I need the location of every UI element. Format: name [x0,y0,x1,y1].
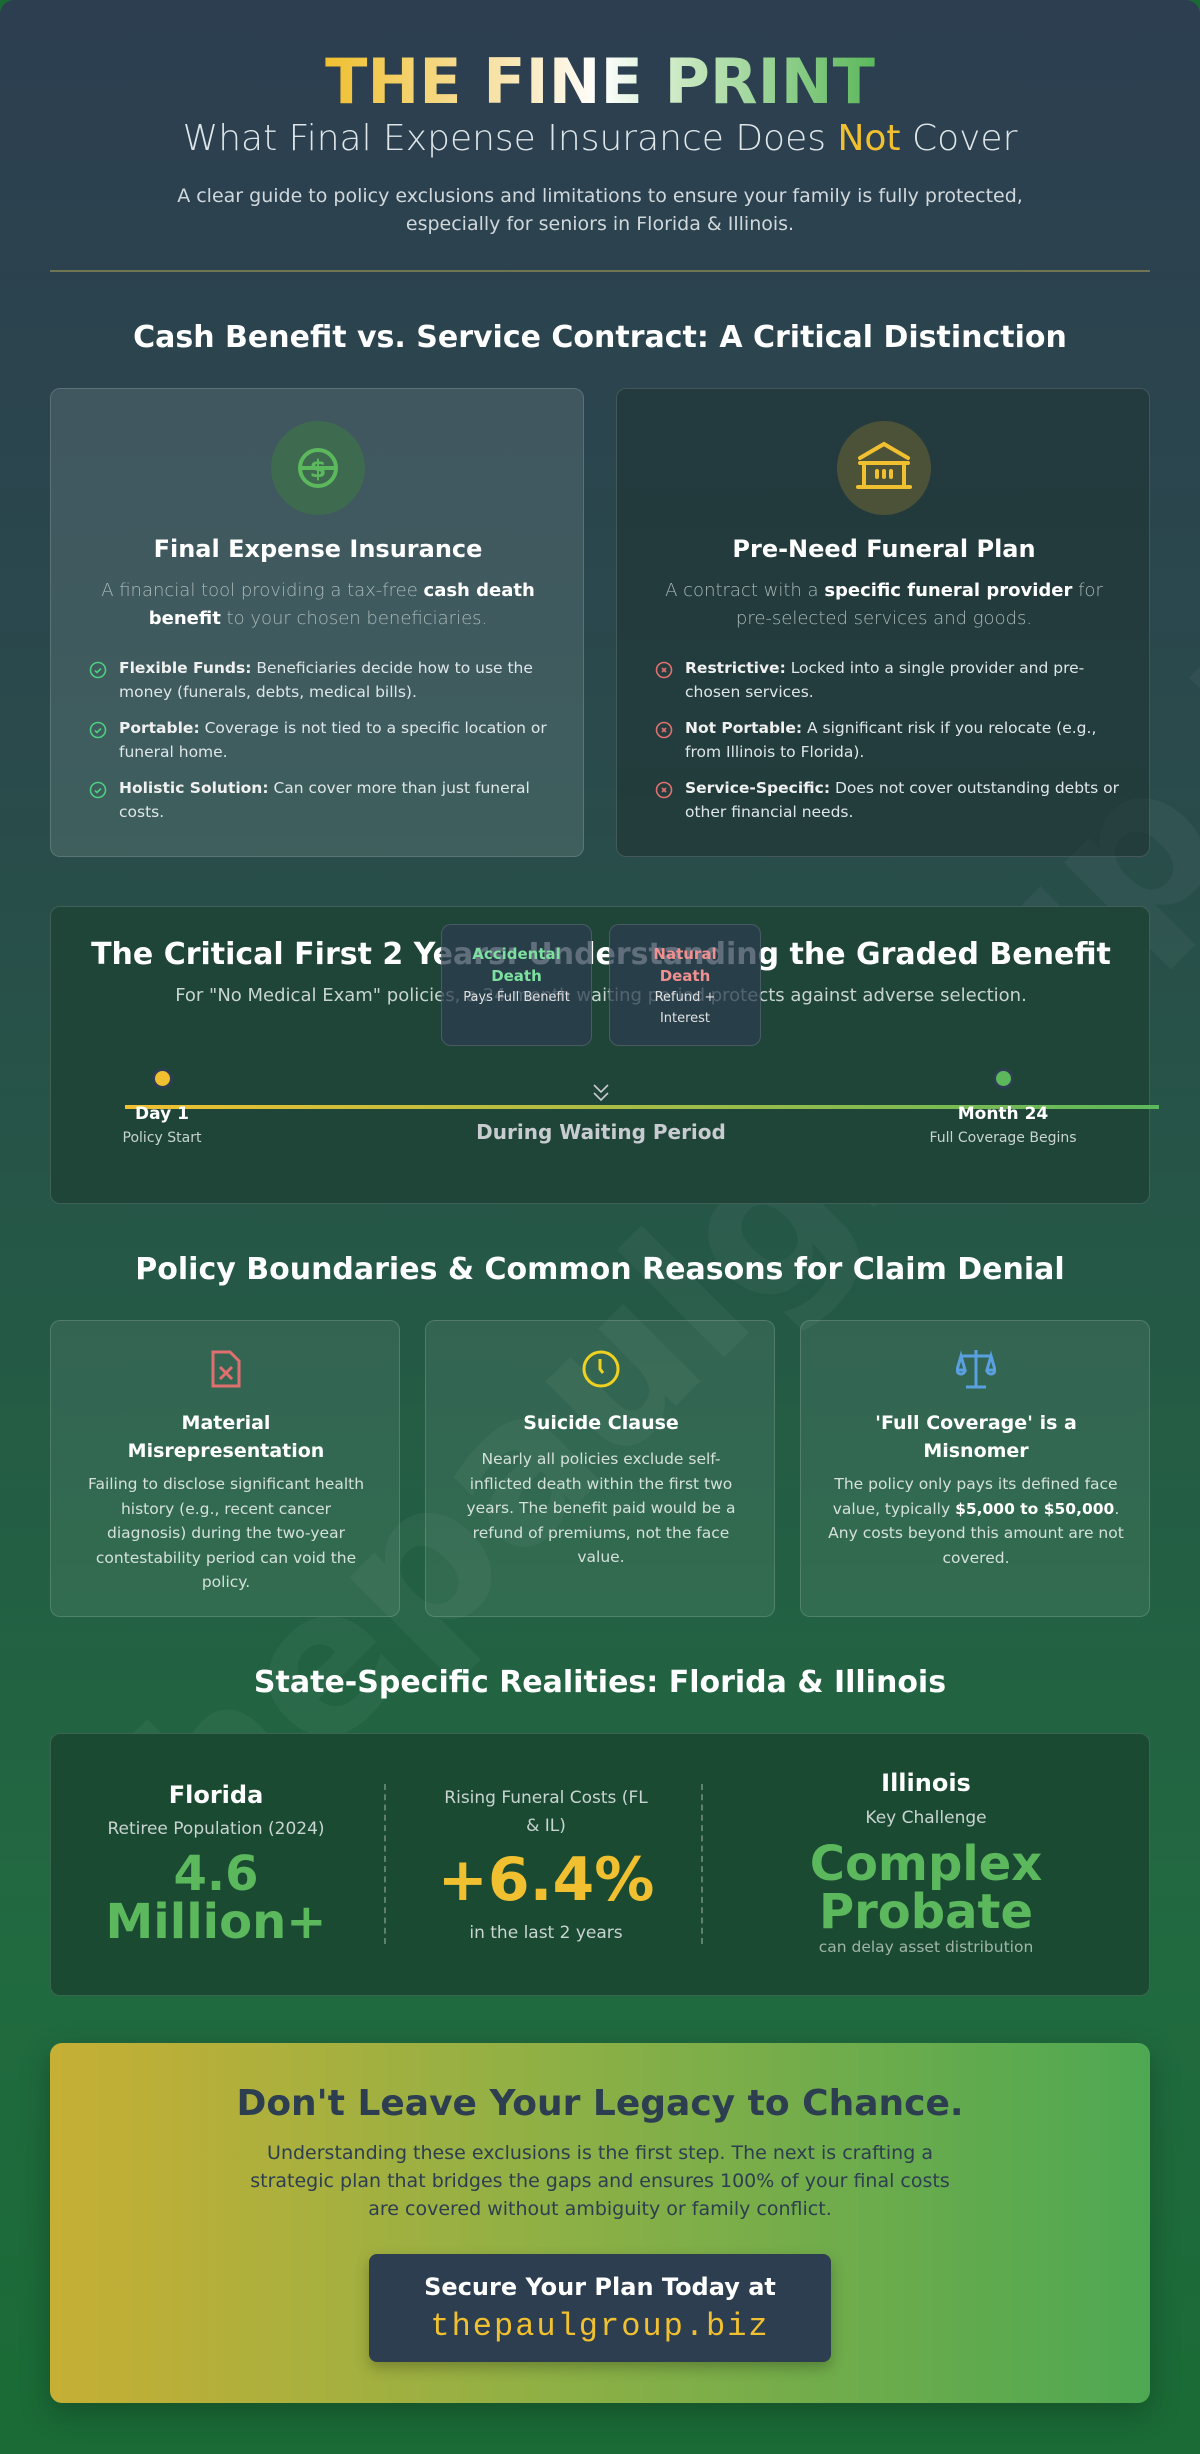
heading: graded benefit: The Critical First 2 Years: Understanding the Graded Benefit [91,937,1111,972]
list: benefits: Holistic Solution: Can cover more than just funeral costs. [119,779,530,821]
stat: florida [106,1781,326,1950]
subtext: For "No Medical Exam" policies, a 24-month waiting period protects against adverse selection. [175,985,1027,1006]
cta button: Secure Your Plan Today at [424,2273,776,2301]
card text: Failing to disclose significant health history (e.g., recent cancer diagnosis) during the two-year contestability period can void the policy. [88,1475,364,1591]
stat: illinois [810,1769,1042,1956]
box: natural death [609,924,761,1046]
panel: suicide clause [425,1320,775,1617]
stat: florida: Florida [169,1781,263,1809]
stat: funeral costs: in the last 2 years [469,1923,623,1943]
panel: material misrepresentation [50,1320,400,1617]
card title: 'Full Coverage' is a [875,1412,1077,1434]
stat: illinois: Illinois [881,1769,971,1797]
card text: Nearly all policies exclude self-inflicted death within the first two years. The benefit paid would be a refund of premiums, not the face value. [466,1450,736,1566]
stat: funeral costs: & IL) [526,1816,566,1836]
list: benefits: Flexible Funds: Beneficiaries decide how to use the money (funerals, debts, medical bills). [119,659,533,701]
icon: building [837,421,931,515]
icon: dollar [271,421,365,515]
card title: Final Expense Insurance [154,535,482,563]
icon: file x [212,1350,240,1388]
icon: dollar: $ [310,455,326,483]
box: natural death: Natural [653,945,717,963]
panel: graded benefit [50,906,1150,1204]
heading: cash vs service: Cash Benefit vs. Service Contract: A Critical Distinction [133,320,1067,355]
stat: florida: Retiree Population (2024) [107,1819,325,1839]
heading: claim denial: Policy Boundaries & Common Reasons for Claim Denial [135,1252,1065,1287]
icon: clock [582,1350,620,1388]
card title: Misrepresentation [128,1440,324,1462]
stat: illinois: can delay asset distribution [819,1938,1033,1956]
panel: call to action [50,2043,1150,2403]
title: THE FINE PRINT [325,45,875,118]
intro text: A clear guide to policy exclusions and limitations to ensure your family is fully protected, especially for seniors in Florida & Illinois. [177,185,1023,235]
panel: pre-need funeral plan [616,388,1150,857]
card description: A financial tool providing a tax-free cash death benefit to your chosen beneficiaries. [101,580,535,629]
list: drawbacks [656,659,1119,821]
box: natural death: Death [660,967,710,985]
list: benefits: Portable: Coverage is not tied to a specific location or funeral home. [119,719,547,761]
card text: The policy only pays its defined face value, typically $5,000 to $50,000. Any costs beyond this amount are not covered. [828,1475,1124,1566]
timeline: Full Coverage Begins [929,1130,1077,1146]
list: drawbacks: Service-Specific: Does not cover outstanding debts or other financial needs. [685,779,1119,821]
box: natural death: Refund + [655,990,715,1005]
card title: Suicide Clause [523,1412,679,1434]
cta button: thepaulgroup.biz [430,2308,770,2345]
stat: funeral costs: +6.4% [438,1845,654,1915]
stat: illinois: Probate [819,1884,1033,1940]
list: drawbacks: Not Portable: A significant risk if you relocate (e.g., from Illinois to Florida). [685,719,1096,761]
panel: state stats [50,1733,1150,1996]
card title [128,1412,324,1462]
timeline: Day 1 [135,1104,189,1124]
cta text: Understanding these exclusions is the first step. The next is crafting a strategic plan that bridges the gaps and ensures 100% of your final costs are covered without ambiguity or family conflict. [250,2142,950,2220]
stat: illinois: Key Challenge [865,1808,987,1828]
box: accidental death: Accidental [472,945,561,963]
heading: state realities: State-Specific Realities: Florida & Illinois [254,1665,946,1700]
cta heading: Don't Leave Your Legacy to Chance. [236,2083,964,2124]
panel: full coverage misnomer [800,1320,1150,1617]
cta button [369,2254,831,2362]
box: natural death: Interest [660,1011,710,1026]
panel: final expense insurance [50,388,584,857]
card description: A contract with a specific funeral provider for pre‑selected services and goods. [665,580,1103,629]
timeline [123,1068,1159,1146]
stat: funeral costs: Rising Funeral Costs (FL [444,1788,648,1808]
stat: florida: 4.6 [173,1846,259,1902]
stat: funeral costs [438,1788,654,1943]
list: benefits [90,659,547,821]
card title: Misnomer [923,1440,1029,1462]
card title: Material [182,1412,270,1434]
card title [875,1412,1077,1462]
timeline: Month 24 [958,1104,1048,1124]
box: accidental death: Death [491,967,542,985]
card title: Pre-Need Funeral Plan [732,535,1036,563]
subtitle: What Final Expense Insurance Does Not Cover [183,118,1017,159]
icon: scales [956,1350,996,1388]
timeline: During Waiting Period [476,1120,726,1144]
box: accidental death: Pays Full Benefit [463,990,570,1005]
box: accidental death [441,924,592,1046]
list: drawbacks: Restrictive: Locked into a single provider and pre-chosen services. [685,659,1084,701]
stat: florida: Million+ [106,1894,326,1950]
stat: illinois: Complex [810,1836,1042,1892]
timeline: Policy Start [123,1130,201,1146]
